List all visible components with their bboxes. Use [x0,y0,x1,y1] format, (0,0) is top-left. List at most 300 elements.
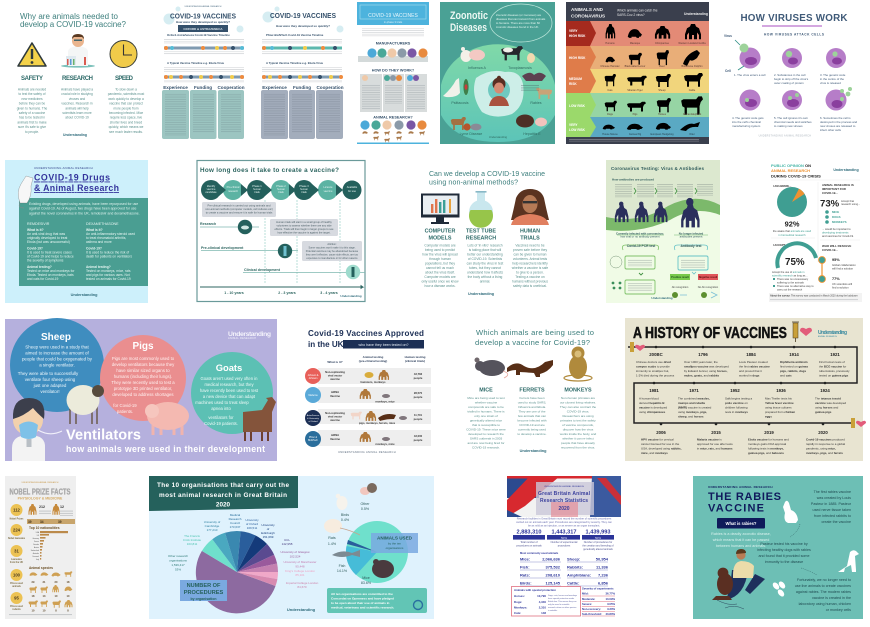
table: common animals: Amphibians: [567,572,591,578]
sheep circle: just one adapted [33,383,67,388]
footer [9,614,72,616]
column dividers [771,180,860,262]
text: testing on dogs: infecting healthy dogs with rabies [757,548,811,552]
background [625,318,863,461]
logo: ANIMAL RESEARCH [818,335,838,338]
header: CORONAVIRUS [571,14,605,18]
intro text: Research facilities in Great Britain must record the number of scientific procedures [517,516,612,520]
stat circles: animals [12,586,21,588]
stat: 73 percent: ANIMAL RESEARCH IS [822,183,854,187]
illustration: sheep [66,385,104,424]
body text: animals first to make [17,120,47,124]
body text: and are now being bred for [468,441,504,445]
text cards [261,85,344,139]
gauge: 75 percent: suffering to the animals [777,280,804,284]
callout: concordat: to be open about their use of animals in [331,601,390,605]
pigs circle: for Covid-19 [113,403,137,408]
stage markers [201,180,362,200]
heading: who have they been tested on? [359,343,408,347]
title [450,10,488,34]
text: testing on dogs [757,542,811,564]
box: special protection: have special protection under [548,597,574,600]
risk chevrons: HIGH RISK [569,56,586,60]
pie chart: procedures by organisation [196,531,278,613]
pie labels: 173,637 [230,525,241,529]
column: remdesivir: Ebola. Tested on monkeys, bats [27,273,74,277]
panel: why animals are needed [17,12,144,137]
third row of events: Malaria vaccine is [697,438,722,442]
pie labels: Crick Institute [183,538,201,542]
body text: viruses and [69,97,85,101]
headline stats: Number of experimental [551,541,578,544]
pie labels: animals: 0.4% [341,518,350,522]
illustration: rabies animals: Rabies [530,101,542,105]
stat: 73 percent: MICE [832,210,839,214]
body text: volunteers. Animal tests [513,257,548,261]
medium risk silhouettes: Sheep [658,89,666,92]
text: testing on dogs: Pasteur tested his vaccine by [760,542,808,546]
animal species grid [28,566,72,612]
text: Pasteur rabbit vaccine: Pasteur in 1885. Pasteur [811,502,852,506]
column headers [327,355,426,364]
body text: Animals are needed [18,88,46,92]
risk chevrons: MEDIUM [569,77,582,81]
row: Johnson and Johnson [305,368,431,384]
heading: How were they developed so quickly? [176,20,230,24]
text: modern vaccines: Fortunately, we no longer need to [797,578,851,582]
row: AstraZeneca Oxford: of Oxford [308,420,318,423]
step captions: 5. The cell ignores it's own [774,116,808,120]
stat circles [8,504,26,611]
row: Johnson and Johnson: hamsters, monkeys [360,380,386,384]
stats: who will resolve: Global collaboration [832,263,856,267]
stage markers: candidate [205,190,217,194]
panel: Oxford AstraZeneca vaccine timeline [162,5,245,139]
step captions: 6. Sometimes the cell is [820,116,851,120]
icon: monkey [564,346,592,381]
icon: virus decorations [164,6,244,32]
note: attrition: Some vaccines won't make it to this stage. [308,246,356,250]
very low risk silhouettes: European Hedgehog [650,133,674,136]
first row of events: 200BC [649,352,663,357]
virus and cell labels [724,34,744,73]
headline stats: Total number of [520,541,538,544]
column headings: RESEARCH [62,76,93,82]
illustration: rabies animals [521,73,552,105]
prize sharing bar: 34 [40,520,44,524]
test results: Negative result [699,275,717,279]
footer credit: UNDERSTANDING ANIMAL RESEARCH [759,134,811,138]
heading [20,12,127,29]
row: AstraZeneca Oxford: people [414,417,423,421]
animal species grid: 18 [32,594,35,598]
virus and cell labels: Cell [725,69,731,73]
body text: vaccine that can protect [109,102,143,106]
low risk silhouettes [605,96,703,116]
bar chart: top 10 nationalities: Top 10 nationalities [29,526,60,530]
body text: being used to predict [425,248,455,252]
body text: pandemic, scientists must [108,92,144,96]
box: special protection: 10,790 [537,594,546,598]
body text: can study the virus in test [467,262,503,266]
row: Pfizer BioNTech [305,430,431,447]
intro text: be as mild as an injection, or as severe as an organ transplant. [528,524,600,528]
body text: currently being used [518,428,546,432]
text: modern vaccines: laboratory using human, chicken [799,602,851,606]
gauge: 75 percent: scientific research as long as... [772,274,808,278]
body text: more people from [114,106,139,110]
pie labels: University [261,523,275,527]
time axis: 2 - 3 years [278,291,296,295]
heading: NOBEL PRIZE FACTS [10,488,71,496]
illustration: patient with mask [12,398,62,461]
second row of events: 1952 [730,388,740,393]
first row of events: 1796 [698,352,708,357]
second row of events: derived hepatitis B [639,401,664,405]
heading: THE RABIES [708,491,781,503]
box: special protection: British law. This means they can [548,600,577,603]
pigs circle: humans (including their lungs). [114,374,172,379]
background [5,319,277,461]
table: severity of experiments [582,586,616,616]
stat circles: Nobel laureates [8,537,26,540]
footer bar [357,142,429,144]
goats circle: machines used to treat sleep [195,400,249,405]
row: Moderna: mRNA [331,390,339,394]
column: dexamethasone [86,222,135,281]
body text: tubes, but they cannot [469,266,501,270]
box: special protection: Cats: [514,611,521,615]
stage markers: Identify [207,184,216,188]
body text: shorter lives and breed [110,120,142,124]
column: dexamethasone: An anti-inflammatory steroid used [86,232,135,236]
second row of events: The tetanus toxoid [815,396,841,400]
headline stats: 50% [595,536,601,540]
body text: becoming infected. Mice [109,111,143,115]
illustration: man with dog [712,549,765,609]
panel: vaccines approved in the UK [305,329,431,454]
pie labels: University of [204,520,220,524]
pie labels: animals: 1.4% [328,542,337,546]
second row of events: vaccine was developed [815,401,847,405]
table: common animals: 125,145 [546,580,561,586]
range labels: Currently infected with coronavirus: [616,232,664,236]
body text: how the virus will spread [422,252,458,256]
third row of events: cancer licensed for use in the [641,442,680,446]
body text: that is susceptible to [472,423,500,427]
column headers: (pre-clinical testing) [359,359,387,363]
PCR test steps [610,256,655,294]
row: Moderna: Moderna [308,394,318,397]
very high risk silhouettes: Humans [605,42,615,45]
column: remdesivir: and cats for Covid-19 [27,277,59,281]
pie labels [168,513,319,589]
animal species grid: 10 [55,594,58,598]
column headers: Human testing [405,355,426,359]
bar chart: top 10 nationalities: France [34,541,39,543]
logo: Understanding [287,607,316,612]
logo: Understanding [651,296,673,300]
pie labels: UCL [284,538,290,542]
body text: work quickly to develop a [108,97,144,101]
second row of events: vaccine is developed [639,406,667,410]
title box: The 10 organisations that carry out the [157,482,289,489]
stats: who will resolve: WHO WILL RESOLVE [822,244,851,248]
stage markers: Phase 1 [252,184,262,188]
title box: 2020 [216,502,231,508]
row: AstraZeneca Oxford [305,409,431,426]
note: attrition: expensive to manufacture or for other reasons [306,257,358,260]
header banner: in-phase 3 trials [384,20,403,24]
animal species grid: 10 [32,608,35,612]
body text: to develop a vaccine. [517,432,547,436]
body text: about the virus itself. [425,270,455,274]
risk chevrons: HIGH RISK [569,34,586,38]
heading [771,163,821,178]
risk chevrons: LOW RISK [569,128,586,132]
heading: PUBLIC OPINION ON [771,163,811,168]
row: Johnson and Johnson: Johnson & [308,375,319,377]
row: Johnson and Johnson: Johnson [309,378,318,380]
background [693,476,863,619]
column: dexamethasone: tested on animals for Covid-19 [86,277,131,281]
body text: Vaccines need to be [515,244,545,248]
stats: who will resolve: COVID-19... [822,248,838,252]
icon: clock [110,40,137,68]
third row of events: pandemic, using mice, [806,446,836,450]
high risk silhouettes: Chinese Hamster [600,65,620,68]
panel background [5,160,148,303]
body text: used to study SARS, [518,400,546,404]
bar chart: top 10 nationalities: Switzerland [31,549,39,552]
pie labels: animals: 14.1% [337,569,348,573]
body text: quickly, which means we [109,125,144,129]
callout: concordat: Concordat on Openness and have pledged [331,596,394,600]
pie labels: animals: Birds [341,513,349,517]
stage markers: Phase 3 [299,184,309,188]
column headings: HUMAN [520,228,540,234]
animal species grid: 13 [43,594,46,598]
stat: 73 percent: research using... [841,202,860,206]
test results [670,274,719,298]
row: AstraZeneca Oxford: & University [307,417,320,420]
pie labels: 102,524 [290,554,301,558]
header banner: COVID-19 VACCINES [368,13,418,19]
step captions: 3. The genetic code [820,73,846,77]
body text: our closest living relatives. [560,400,596,404]
intro text: carried out on animals each year. Procedures are categorised by severity. They can [516,520,612,524]
column: dexamethasone: Animal testing? [86,265,111,269]
panel: top 10 organisations [149,476,434,619]
column: remdesivir: What is it? [27,228,44,232]
table: severity of experiments: Severity of experiments [582,586,614,590]
goats circle [191,352,273,434]
title: Great Britain Animal [538,491,591,497]
body text: Non-human primates are [561,396,595,400]
header: SARS-Cov-2 virus? [617,13,645,17]
heading: in the UK [308,340,344,349]
column headings: SAFETY [21,76,43,82]
row: AstraZeneca Oxford: Non-replicating [325,411,345,415]
body text: vaccines. Research in [61,102,93,106]
pie labels: animals: Rats [328,536,336,540]
illustration: hepatitis E animals: Hepatitis E [523,132,541,136]
range labels: No longer infected [679,232,704,236]
stat: 73 percent: 73% [820,198,840,210]
column: dexamethasone: Tested on monkeys, mice, rats [86,269,131,273]
antibody test steps [678,256,708,274]
first row of events: First human tests of [819,360,845,364]
step captions: begin to strip off the virus's [774,77,809,81]
body text: few animals that can [518,414,546,418]
row: AstraZeneca Oxford: vaccine [330,418,340,422]
body text: only useful once we know [421,280,459,284]
body text: better our understanding [467,252,503,256]
second row of events: Salk begins testing a [725,396,752,400]
row: AstraZeneca Oxford: viral vector [328,414,342,418]
box: special protection: Horses: [514,594,525,598]
body text: primates to test the safety [560,418,596,422]
column: remdesivir: It is used to treat severe cases [27,250,72,254]
first row of events: tested on guinea pigs [819,374,849,378]
pigs circle: developed to address shortages [112,392,174,397]
pigs circle: develop ventilators because they [112,362,175,367]
title: Zoonotic [450,10,488,22]
headline stats: Number of procedures for [584,541,612,544]
second row of events: children following [725,406,748,410]
body text: populations, but they [425,262,455,266]
low risk silhouettes: Pigs [633,113,638,116]
body text: safety data is unethical. [513,284,547,288]
goats circle: ventilators for [208,415,234,420]
headline stats: genetically altered animals [583,548,613,551]
illustrations: animals [324,483,394,578]
pie labels: Edinburgh [261,531,275,535]
test headings: Covid-19 PCR test [627,244,656,248]
column: dexamethasone: It is used to reduce the risk of [86,250,129,254]
second row of events: prepared from chicken [765,410,795,414]
gauge: 75 percent: Accept the use of animals in [772,270,805,274]
pie labels: 169,511 [247,526,258,530]
pie labels: animals: Mice [362,576,370,580]
text: testing on dogs: and found that it provided some [758,554,810,558]
animal research columns [360,120,427,142]
high risk silhouettes: Deer [659,65,665,68]
animal species grid: 10 [67,594,70,598]
table: common animals: 50,954 [596,556,609,562]
row: Pfizer BioNTech: 43,000 [414,434,423,438]
panel: how viruses work [724,13,858,138]
column: dexamethasone: to treat rheumatoid arthritis, [86,236,126,240]
third row of events: mice, and monkeys [641,451,668,455]
third row of events: in mice, rats, and humans [697,446,733,450]
body text: Animals have played a [61,88,93,92]
table: common animals: 208,610 [546,572,561,578]
column: dexamethasone: death for patients on ventilators [86,254,132,258]
step captions: new viruses are released to [820,124,856,128]
row: Moderna [305,387,431,404]
body text: sure it's safe to give [18,125,46,129]
stat: 73 percent: Accept that [841,199,854,203]
frame [197,160,365,302]
pie labels: Cambridge [205,524,220,528]
stat circles: Laureates [11,558,23,561]
description callout: Zoonotic diseases (or zoonoses) are [496,13,542,17]
icon: mouse [474,358,508,378]
stage: research [200,220,259,234]
column: dexamethasone: and pigs for various uses. Not [86,273,130,277]
pie labels: 84,670 [297,585,307,589]
body text: genetically altered mice [470,418,502,422]
heading [34,166,119,193]
dashed phase guides [265,200,340,284]
third row of events: rapidly in response to a global [806,442,845,446]
note: human trials: effects. Trials will then begin in larger groups to see [275,227,334,231]
row: Johnson and Johnson: viral vector [328,374,342,378]
heading: How were they developed so quickly? [276,24,330,28]
column headings: MICE [479,388,493,394]
bar chart: top 10 nationalities: Germany [32,538,39,540]
first row of events: cowpox scabs to provide [636,364,670,368]
title: Research Statistics [540,498,588,504]
body text: COVID-19 virus. [567,410,589,414]
stat circles: Nobel Prizes [10,518,24,520]
column headings: SPEED [115,76,134,82]
intro text [516,516,612,528]
body text: has to be tested in [19,116,45,120]
very high risk silhouettes [605,24,706,45]
body text: They are one of the [519,410,546,414]
pie labels: 177,210 [207,528,218,532]
table: common animals: Birds: [520,580,532,586]
heading: PHYSIOLOGY & MEDICINE [18,496,63,500]
risk chevrons: LOW RISK [569,104,586,108]
second row of events: tests in monkeys [725,410,748,414]
first row of events: 1-2% died during the process [636,374,675,378]
row: Pfizer BioNTech: Pfizer & [309,436,317,439]
first row of events: by Edward Jenner, using horses, [684,369,728,373]
banner: animals used: ANIMALS USED [377,536,413,540]
body text: is taking place that will [469,248,501,252]
header [566,2,709,21]
step captions: to making new viruses [774,124,803,128]
text: Pasteur rabbit vaccine: The first rabies vaccine [814,490,851,494]
column headings: COMPUTER [425,228,456,234]
second row of events [639,388,847,418]
pie labels: Medical [230,513,240,517]
first row of events: 1884 [746,352,756,357]
body text: of COVID-19. Scientists [468,257,503,261]
box: special protection: Animals with special protection [514,588,556,592]
second row of events: mumps and rubella [678,401,705,405]
logo: Understanding [818,330,847,336]
first row of events: Over 1000 years later, the [684,360,718,364]
very low risk silhouettes [602,122,700,136]
title: How long does it take to create a vaccine? [200,167,339,174]
note: pre-clinical [202,202,276,217]
callout: concordat: All ten organisations are committed to the [331,592,393,596]
prize sharing bar: 39 [58,520,62,524]
row: AstraZeneca Oxford: AstraZeneca [307,414,320,417]
explanation cards [360,74,427,112]
figures: infected and recovered people [615,198,700,227]
goats circle: have recently been used to test [200,388,259,393]
timeline: Pfizer: Pfizer-BioNTech Covid-19 Vaccine Timeline [266,33,324,37]
stat: 73 percent: COVID-19... [822,191,838,195]
column: remdesivir: originally developed to treat [27,236,67,240]
icon: scientist [61,34,95,68]
table: severity of experiments: 3.30% [607,607,616,611]
